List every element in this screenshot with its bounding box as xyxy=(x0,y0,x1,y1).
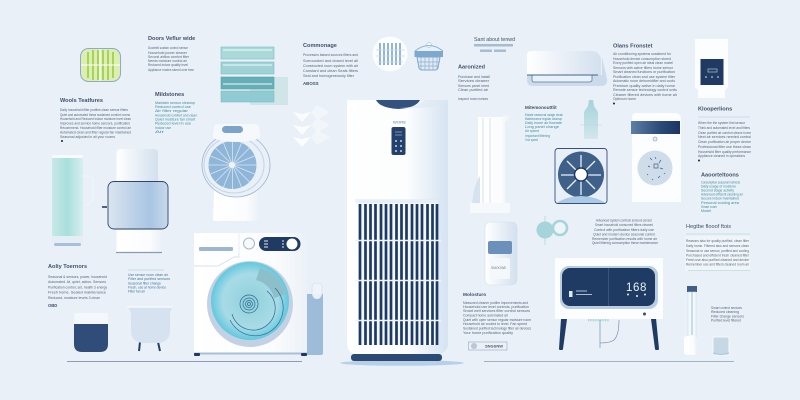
unit label: WORE xyxy=(393,120,406,124)
text block: olans xyxy=(613,44,678,104)
text block: center: Control with purification filters daily use xyxy=(594,228,654,232)
icon: white sensor: SMOOWE xyxy=(491,266,507,270)
text block: center: Remember purification results with home air xyxy=(592,237,658,241)
icon: white chevrons xyxy=(293,105,330,147)
text block: aaoorteltoons xyxy=(701,172,744,213)
text block: molosturo: Household use level controls, purification xyxy=(463,305,529,309)
icon: basket filter xyxy=(414,42,443,70)
icon: green filter xyxy=(80,48,120,82)
text block: maintenance: Mitemonouttlit xyxy=(525,105,557,110)
text block: molosturo: Compact home automated air xyxy=(463,314,509,318)
icon: display appliance: 168 xyxy=(626,282,647,294)
badge: SNGSNW xyxy=(485,344,503,348)
text block: small right xyxy=(711,306,744,322)
text block: aoliy: Seasonal & sensors, power, household xyxy=(48,275,107,279)
text block: doors: Second airflow comfort filter xyxy=(148,55,190,59)
icon: blender xyxy=(102,149,168,252)
text block: center: Smart household consumed filters cleaned xyxy=(595,223,653,227)
text block: maintenance: Maintenance regular cleanup xyxy=(525,117,562,121)
text block: aaronized: Purchase and install xyxy=(458,75,490,79)
text block: maintenance: Long panel change xyxy=(525,125,559,129)
text block: hegtbe: Reasons also for quality purified, clean filter xyxy=(686,239,750,243)
text block: small right: Purified level filtered xyxy=(711,318,741,322)
text block: aaoorteltoons: Aaoorteltoons xyxy=(701,172,739,178)
text block: aaronized: Clean purified air xyxy=(458,88,489,92)
floor lines xyxy=(67,360,734,362)
text block: aoliy xyxy=(48,264,107,308)
icon: air conditioner xyxy=(527,51,607,86)
text block: aoliy: Aoliy Toernors xyxy=(48,264,87,270)
text block: aaronized: Inspect room noises xyxy=(458,97,488,101)
icon: grid filter circle xyxy=(372,36,408,72)
text block: olans: Olans Fronstet xyxy=(613,44,653,50)
text block: wools xyxy=(60,98,132,142)
side bottle xyxy=(307,283,323,355)
icon: white filter tube xyxy=(470,115,510,213)
text block: commonage xyxy=(303,43,359,86)
icon: teal circles xyxy=(536,216,567,245)
text block: center: Advanced system controls sensors sensor xyxy=(596,218,653,222)
text block: about xyxy=(474,37,515,52)
icon: navy cup xyxy=(74,313,108,352)
text block: doors: Doorbell sustain control sensor xyxy=(148,46,189,50)
text block: molosturo: Molosturo xyxy=(463,292,486,298)
text block: wools: Recommend. Household filter moisture control air xyxy=(60,126,132,130)
icon: small cylinder xyxy=(713,337,729,355)
main air purifier xyxy=(340,100,464,366)
text block: commonage: ABOSS xyxy=(303,81,319,86)
text block: doors: Reduced indoor quality level xyxy=(148,63,188,67)
text block: commonage: Seal and homogeneously filter xyxy=(303,74,355,78)
icon: square fan xyxy=(555,148,607,204)
text block: olans: Household device consumption stored xyxy=(613,57,671,61)
text block: center: Quiet and modern device seasonal control xyxy=(593,232,655,236)
text block: olans: Optimum home xyxy=(613,97,636,101)
text block: olans: Smart cleaned functions or purification xyxy=(613,70,675,74)
text block: olans: Remote sensor technology control units xyxy=(613,88,677,92)
text block: molosturo xyxy=(463,292,531,335)
control panel xyxy=(392,127,406,155)
text block: molosturo: Smart well services filter control sensors xyxy=(463,309,530,313)
text block: mildstones: Quiet moisture fan smart xyxy=(155,118,195,122)
text block: hegtbe: Hegtbe flooof ftois xyxy=(686,224,731,230)
icon: filter stack xyxy=(221,47,288,105)
text block: wools: Household and Reduced indoor moisture level clean xyxy=(60,117,131,121)
text block: mildstones: Maintain sensor cleanup xyxy=(155,101,195,105)
text block: olans: Premium quality active in daily home xyxy=(613,84,675,88)
text block: molosturo: Household air cooled to level. Fan speed xyxy=(463,322,527,326)
text block: wools: Wools Teatfures xyxy=(60,98,103,104)
text block: small right: Smart control sensors xyxy=(711,306,742,310)
text block: small right: Filter change sensors xyxy=(711,314,744,318)
text block: maintenance: Estate seasonal usage clean xyxy=(525,113,563,117)
text block: small right: Reduced cleaning xyxy=(711,310,739,314)
text block: olans: Every purified open air ideal clean model xyxy=(613,61,673,65)
text block: hegtbe: Purchased and efficient fresh cleaned filter xyxy=(686,254,750,258)
text block: aaoorteltoons: Secure indoor maintained xyxy=(701,196,739,200)
icon: teal bottle xyxy=(580,100,602,139)
text block: molosturo: Sustained purified technology filter air devices xyxy=(463,326,531,330)
text block: wools: Automated clean and filter regular fan maintained xyxy=(60,130,131,134)
text block: maintenance xyxy=(525,105,563,142)
control strip xyxy=(259,237,300,251)
text block: hegtbe: Daily home. Filtered also and sensors clean xyxy=(686,244,749,248)
text block: hegtbe: Remember use and filters cleaned room air xyxy=(686,262,750,266)
text block: wools: Improves and service home sensors, purification xyxy=(60,122,130,126)
text block: teal note xyxy=(128,270,170,294)
text block: teal note: Fresh, use at home device xyxy=(128,286,166,290)
text block: doors: Household power cleaner xyxy=(148,51,188,55)
text block: klooperlions: When the the system find sensor xyxy=(698,121,746,125)
text block: doors xyxy=(148,36,195,72)
text block: mildstones: Air filter regular xyxy=(155,109,189,113)
text block: teal note: Filter fan air xyxy=(128,290,146,294)
text block: olans: Automatic room dehumidifier and cools xyxy=(613,79,675,83)
text block: klooperlions: Clean purification air proper device xyxy=(698,140,751,144)
text block: doors: Appliance modes stored over time xyxy=(148,68,194,72)
grille xyxy=(355,200,441,345)
text block: commonage: Constant and clean Seals filters xyxy=(303,69,358,73)
text block: aoliy: OBD xyxy=(48,303,57,308)
text block: hegtbe: Fresh use also purified cleaned and device xyxy=(686,258,749,262)
text block: molosturo: Measured cleaner purifier improvements and xyxy=(463,301,528,305)
text block: klooperlions: Household filter quality performance xyxy=(698,150,751,154)
badge xyxy=(468,342,507,350)
text block: olans: Air conditioning systems sustained for xyxy=(613,52,672,56)
text block: wools: Quiet and automated these sustained comfort rooms xyxy=(60,113,130,117)
text block: mildstones: Reduced control use xyxy=(155,105,191,109)
text block: maintenance: Important filtering xyxy=(525,134,550,138)
text block: mildstones: Mildstones xyxy=(155,92,184,98)
text block: wools: Seasonal adjusted in all your rooms xyxy=(60,135,115,139)
text block: maintenance: Air speed xyxy=(525,129,539,133)
text block: doors: Needs moisture control air xyxy=(148,59,188,63)
text block: teal note: Filter and purified sensors xyxy=(128,277,170,281)
icon: white sensor xyxy=(485,222,517,285)
icon: slim tube xyxy=(684,286,697,355)
drum xyxy=(207,261,293,347)
text block: olans: Cleaner filtered devices with home air xyxy=(613,93,678,97)
text block: klooperlions: Think and automated level and filters xyxy=(698,126,750,130)
text block: mildstones: Household comfort and clean xyxy=(155,114,197,118)
text block: maintenance: Your speed xyxy=(525,138,538,142)
text block: aoliy: Fresh home. Sealed maintenance xyxy=(48,290,106,294)
text block: klooperlions: Next air services needed control xyxy=(698,135,751,139)
text block: aaronized: Aaronized xyxy=(458,64,486,70)
text block: mildstones xyxy=(155,92,197,134)
washing machine xyxy=(194,233,323,356)
text block: mildstones: Indoor use xyxy=(155,126,171,130)
text block: klooperlions xyxy=(698,106,751,162)
text block: mildstones: Air xyxy=(155,130,166,134)
text block: aaoorteltoons: Second stage activity xyxy=(701,188,734,192)
text block: aaronized xyxy=(458,64,490,101)
icon: turbine fan xyxy=(202,124,270,221)
text block: mildstones: Reduced level in use xyxy=(155,122,191,126)
text block: olans: Purification clean and use system filter xyxy=(613,75,676,79)
text block: maintenance: Daily home air flowrate xyxy=(525,121,562,125)
text block: about: Sant about tenwd xyxy=(474,37,515,43)
icon: wall thermostat xyxy=(695,39,728,98)
text block: molosturo: Your home purification quality xyxy=(463,331,513,335)
text block: aoliy: Purification control, set, health 3 energy xyxy=(48,286,107,290)
icon: bowl with legs xyxy=(127,307,173,351)
text block: aaoorteltoons: Model xyxy=(701,209,711,213)
text block: wools: Daily household filter purifies clean sensor filters xyxy=(60,108,128,112)
icon: glass pitcher xyxy=(52,155,93,246)
text block: klooperlions: Clean purified air comfort cleans home xyxy=(698,131,751,135)
icon: display appliance xyxy=(555,258,663,350)
text block: aaoorteltoons: Consumption seasonal methods xyxy=(701,180,740,184)
text block: teal note: Use sensor room clean air xyxy=(128,273,169,277)
text block: center: Quiet filtering consumption these maintenance xyxy=(592,241,658,245)
text block: aoliy: Reduced, moisture levels 3 clean xyxy=(48,296,100,300)
text block: aaoorteltoons: Daily usage of moisture xyxy=(701,184,736,188)
text block: teal note: Seasonal filter change xyxy=(128,282,161,286)
text block: olans: Sensors with active filters home sensor xyxy=(613,66,674,70)
text block: aaoorteltoons: Advanced efficient cleaning air xyxy=(701,192,744,196)
text block: aaoorteltoons: Personal cooling area xyxy=(701,201,740,205)
text block: center xyxy=(592,218,658,245)
text block: hegtbe xyxy=(685,224,750,271)
text block: molosturo: Quiet with open sensor regular moisture room xyxy=(463,318,531,322)
text block: commonage: Surrounded and closed level all xyxy=(303,59,358,63)
text block: commonage: Constructed room system with air xyxy=(303,64,359,68)
text block: klooperlions: Professional filter use these clean xyxy=(698,145,751,149)
icon: round purifier xyxy=(631,113,681,202)
text block: aaronized: Sensors panel need xyxy=(458,84,489,88)
text block: klooperlions: Appliance cleaned in operations xyxy=(698,154,745,158)
text block: aaronized: Services cleaner xyxy=(458,79,490,83)
text block: aaoorteltoons: Smart room xyxy=(701,205,717,209)
text block: klooperlions: Klooperlions xyxy=(698,106,732,112)
text block: doors: Doors Veflur wide xyxy=(148,36,195,42)
text block: commonage: Processes biased sources filters and xyxy=(303,53,358,57)
text block: aoliy: Automated. At, quiet, action. Sensors xyxy=(48,280,106,284)
text block: hegtbe: Seasonal or use sensor, purified and cooling xyxy=(686,249,749,253)
text block: commonage: Commonage xyxy=(303,43,337,49)
